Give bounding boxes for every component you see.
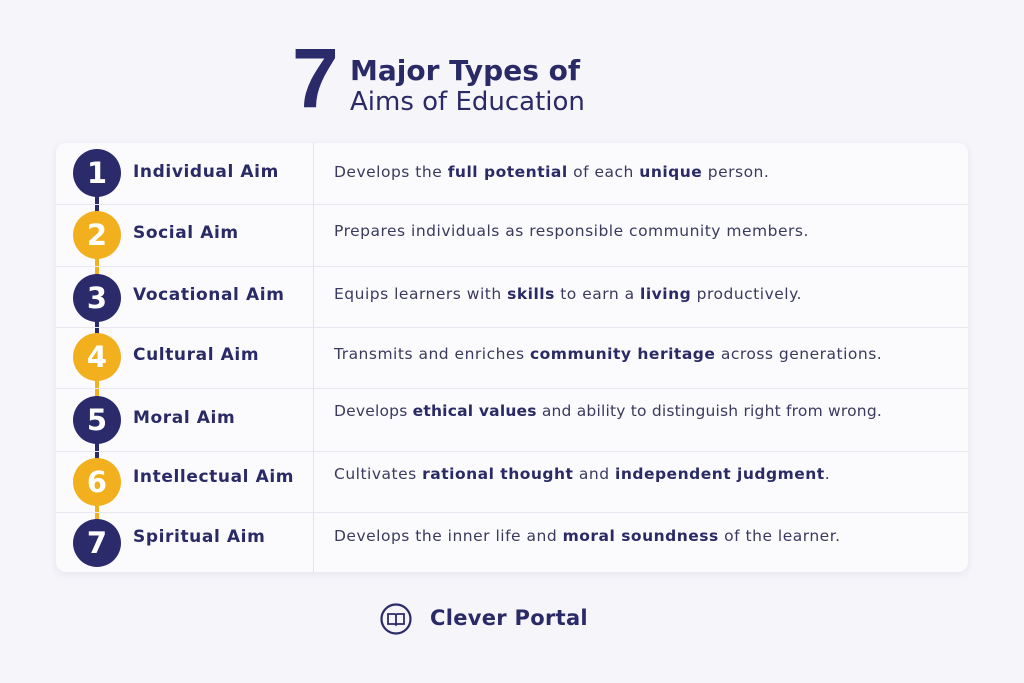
row 1: 1 (87, 156, 107, 190)
row 2 (56, 204, 968, 266)
logo (380, 603, 588, 635)
row 6: Intellectual Aim (133, 467, 294, 487)
row 7: Spiritual Aim (133, 527, 265, 547)
row 3: Equips learners with skills to earn a living productively. (334, 285, 802, 303)
row 5: Develops ethical values and ability to distinguish right from wrong. (334, 402, 882, 420)
row 4: Cultural Aim (133, 345, 259, 365)
row 3 (56, 266, 968, 328)
row 1 (73, 149, 769, 197)
row 1: Develops the full potential of each unique person. (334, 163, 769, 181)
row 5: Moral Aim (133, 408, 235, 428)
title: Major Types of (350, 54, 580, 87)
row 3: Vocational Aim (133, 285, 285, 305)
row 4: Transmits and enriches community heritage across generations. (334, 345, 882, 363)
row 1: Individual Aim (133, 162, 279, 182)
row 2: Social Aim (133, 223, 239, 243)
row 2: 2 (87, 218, 107, 252)
title (292, 31, 585, 125)
row 7: Develops the inner life and moral soundness of the learner. (334, 527, 841, 545)
timeline connectors (95, 172, 99, 542)
row 3: 3 (87, 281, 107, 315)
table panel (56, 143, 968, 572)
row 5 (56, 388, 968, 450)
row 7 (56, 512, 968, 574)
logo: Clever Portal (430, 606, 588, 630)
title: Aims of Education (350, 87, 585, 117)
row 7: 7 (87, 526, 107, 560)
row 4 (56, 327, 968, 389)
icon: book (380, 603, 412, 635)
row 6: Cultivates rational thought and independent judgment. (334, 465, 830, 483)
title: 7 (292, 31, 339, 125)
row 2: Prepares individuals as responsible community members. (334, 222, 809, 240)
row 4: 4 (87, 340, 107, 374)
row 5: 5 (87, 403, 107, 437)
row 6 (56, 451, 968, 513)
row 6: 6 (87, 465, 107, 499)
